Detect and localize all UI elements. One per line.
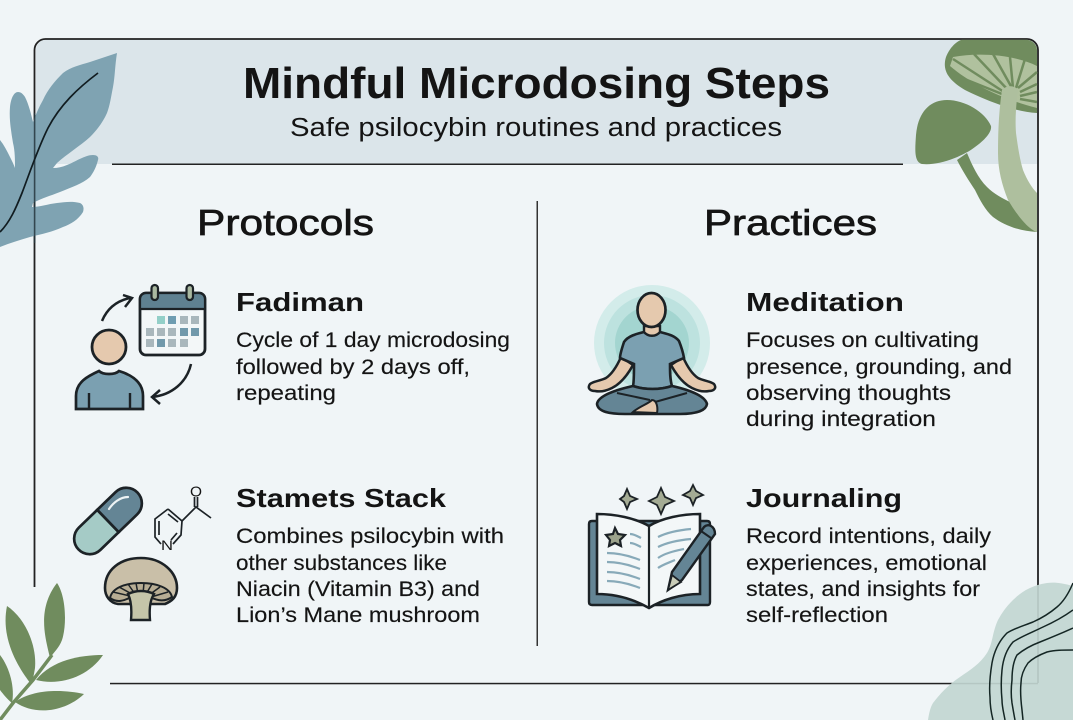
decorative mushrooms: top right (915, 40, 1037, 232)
text block: Fadiman description (236, 328, 510, 405)
icon: capsule, niacin molecule, mushroom: O (190, 484, 202, 500)
heading: Practices: Practices (704, 202, 877, 243)
heading: Fadiman: Fadiman (236, 287, 364, 317)
title: Mindful Microdosing Steps (243, 59, 830, 108)
text block: Stamets Stack description: Niacin (Vitamin B3) and (236, 577, 480, 601)
icon: person with calendar cycle (76, 285, 205, 410)
bottom rule (110, 683, 1038, 684)
text block: Fadiman description: repeating (236, 381, 336, 405)
heading: Meditation: Meditation (746, 287, 904, 317)
text block: Meditation description (746, 328, 1012, 431)
text block: Meditation description: observing thoughts (746, 381, 951, 405)
text block: Journaling description: states, and insights for (746, 577, 980, 601)
heading: Journaling: Journaling (746, 483, 902, 513)
decorative blob with contour lines: bottom right (928, 583, 1073, 720)
subtitle: Safe psilocybin routines and practices (290, 114, 782, 142)
text block: Meditation description: presence, grounding, and (746, 355, 1012, 379)
icon: capsule, niacin molecule, mushroom (68, 481, 211, 620)
heading: Stamets Stack: Stamets Stack (236, 483, 447, 513)
decorative leaf: top left (0, 53, 117, 247)
text block: Meditation description: Focuses on cultivating (746, 328, 979, 352)
icon: capsule, niacin molecule, mushroom: N (161, 537, 173, 553)
text block: Journaling description (746, 524, 991, 627)
text block: Stamets Stack description (236, 524, 504, 627)
icon: meditating figure (589, 285, 715, 414)
text block: Stamets Stack description: other substances like (236, 551, 447, 575)
text block: Journaling description: Record intentions, daily (746, 524, 991, 548)
text block: Meditation description: during integration (746, 407, 936, 431)
text block: Fadiman description: Cycle of 1 day microdosing (236, 328, 510, 352)
text block: Stamets Stack description: Combines psilocybin with (236, 524, 504, 548)
text block: Journaling description: self-reflection (746, 603, 888, 627)
header rule (112, 164, 903, 165)
icon: open journal with pen and sparkles (589, 485, 715, 608)
header band (36, 39, 1037, 164)
text block: Fadiman description: followed by 2 days off, (236, 355, 470, 379)
center divider (536, 201, 538, 646)
text block: Journaling description: experiences, emotional (746, 551, 987, 575)
text block: Stamets Stack description: Lion’s Mane mushroom (236, 603, 480, 627)
heading: Protocols: Protocols (197, 202, 374, 243)
decorative sprig: bottom left (0, 583, 103, 720)
